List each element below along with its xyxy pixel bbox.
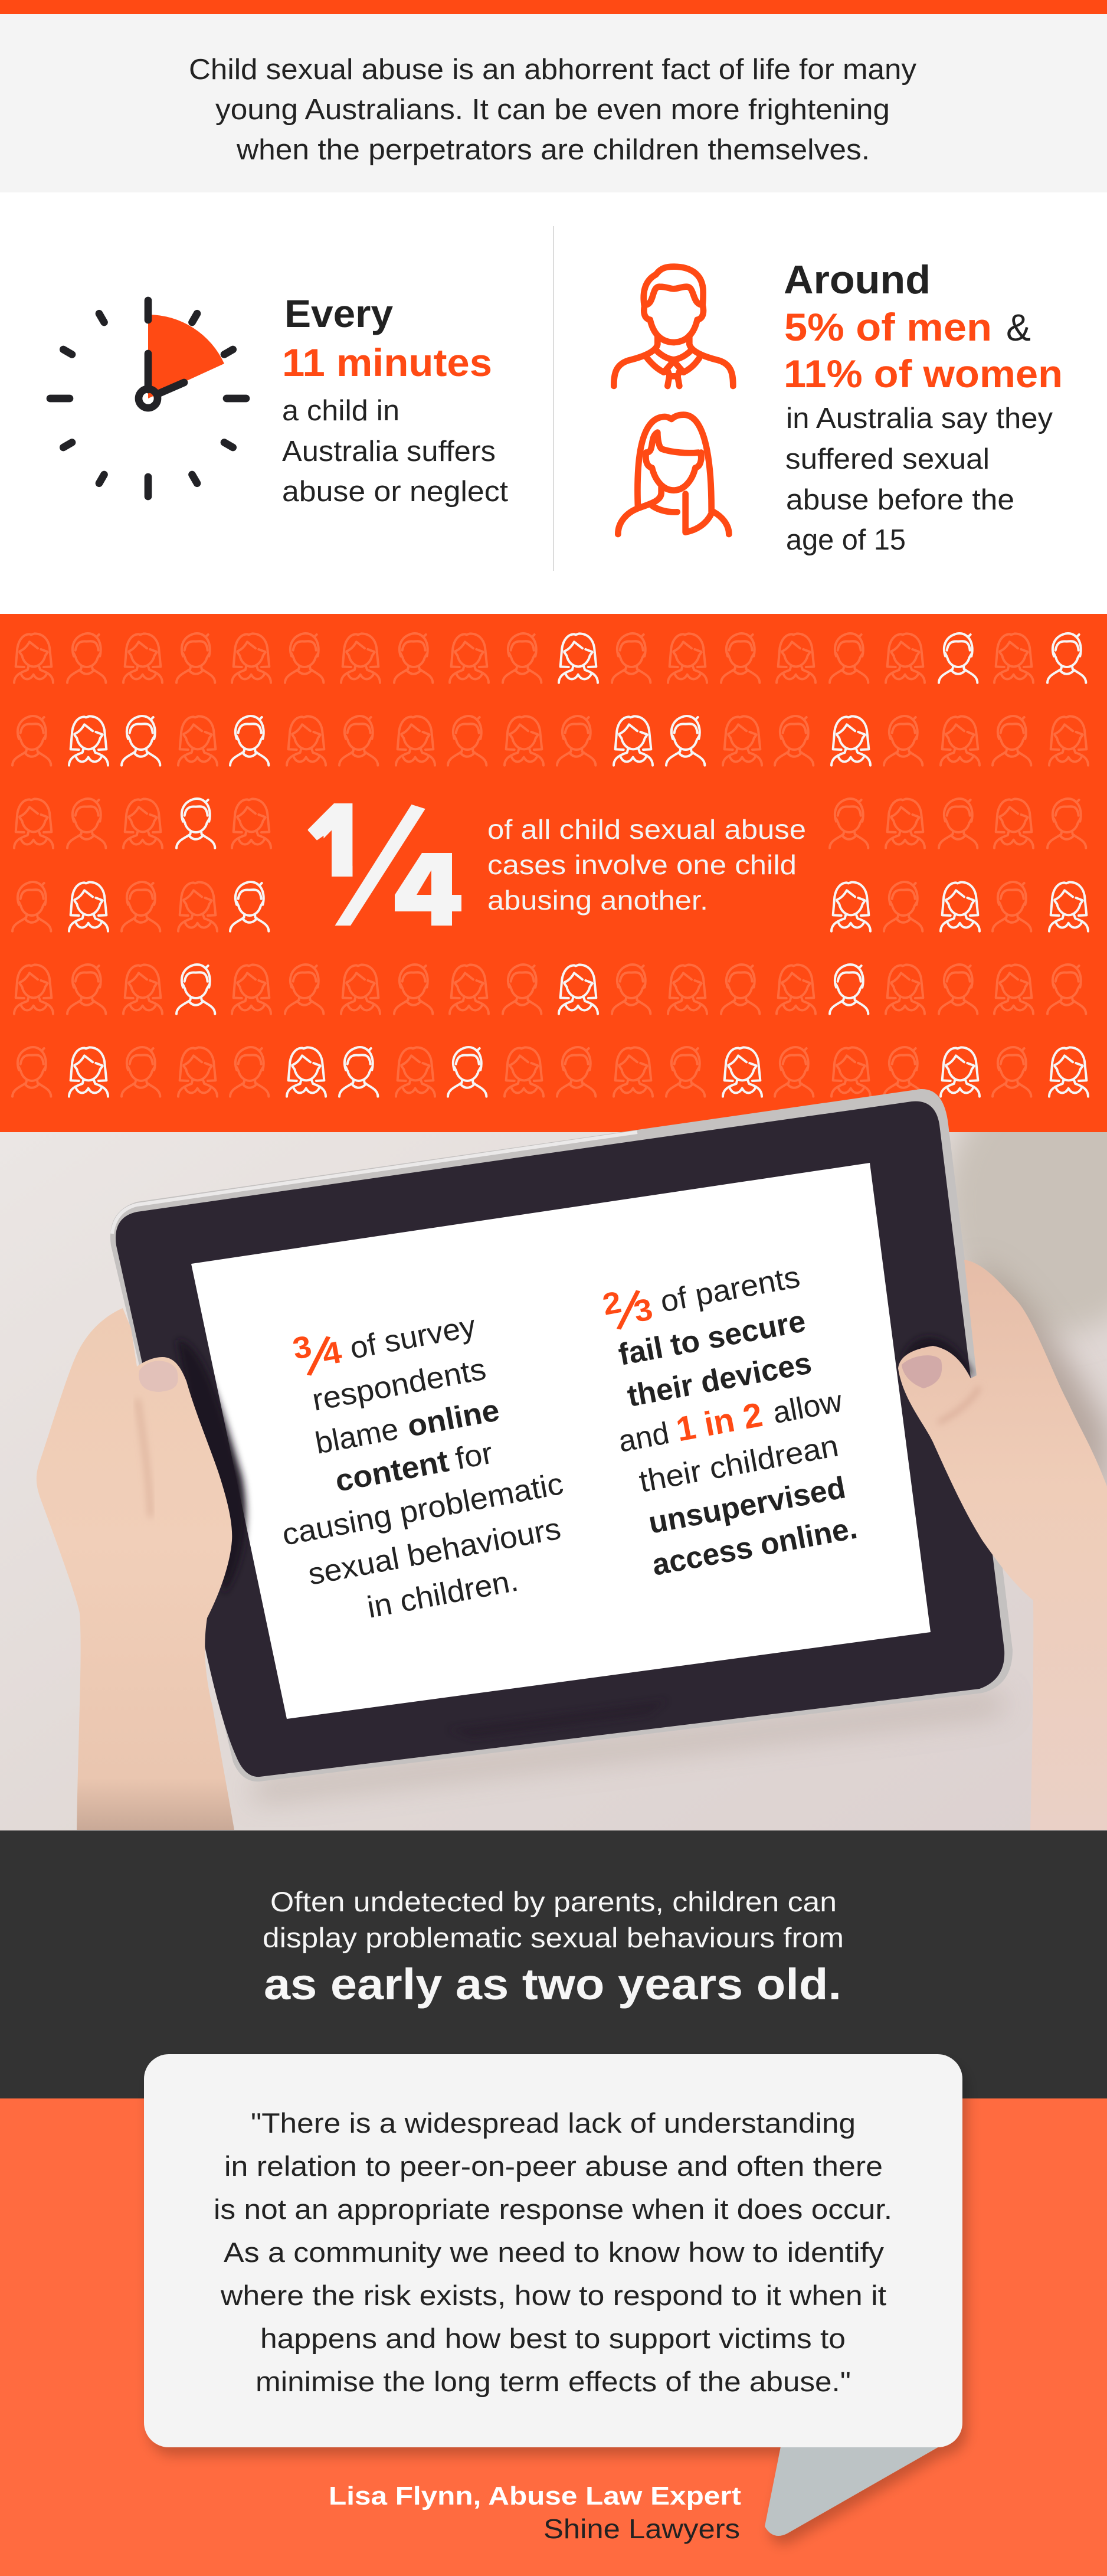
tablet text: online content: online (405, 1393, 502, 1444)
text: every 11 minutes: Australia suffers (282, 436, 496, 468)
early age text: Often undetected by parents, children can (270, 1886, 837, 1917)
icon: clock (50, 300, 246, 496)
panel: early age (0, 1830, 1107, 2098)
quote text: "There is a widespread lack of understanding (251, 2107, 856, 2139)
tablet text: online content: respondents (310, 1352, 489, 1418)
early age text: display problematic sexual behaviours from (263, 1922, 844, 1953)
text: of all cases (487, 814, 806, 916)
tablet text: parents: of parents (658, 1260, 803, 1319)
icon: woman (618, 415, 729, 534)
tablet text: online content: content (333, 1444, 451, 1499)
fraction: one quarter: / (315, 763, 437, 993)
text: 5% of men and 11% of women: 11% of women (784, 352, 1063, 395)
tablet text: parents: 1 in 2 (673, 1395, 765, 1449)
fraction: one quarter: 1 (311, 782, 364, 899)
quote text: in relation to peer-on-peer abuse and often there (224, 2150, 883, 2182)
early age text (263, 1886, 844, 2009)
early age text: as early as two years old. (264, 1960, 841, 2009)
fraction: one quarter (308, 803, 461, 926)
text: 5% of men and 11% of women: age of 15 (786, 524, 906, 556)
text: of all cases: abusing another. (487, 885, 708, 916)
text: every 11 minutes: 11 minutes (282, 341, 492, 384)
text: every 11 minutes: abuse or neglect (282, 476, 508, 508)
text: 5% of men and 11% of women: suffered sexual (785, 443, 990, 475)
right hand (898, 1260, 1107, 1830)
attribution: Shine Lawyers (543, 2513, 740, 2544)
intro text: young Australians. It can be even more frightening (215, 94, 890, 126)
quote text (214, 2107, 892, 2397)
fraction: one quarter: 4 (395, 831, 461, 948)
quote text: happens and how best to support victims to (260, 2323, 846, 2354)
tablet text: parents: allow (770, 1384, 845, 1430)
panel: photo background (0, 1074, 1107, 1830)
highlighted people icons (69, 633, 1088, 1097)
quote speech bubble (144, 2054, 962, 2536)
left hand (37, 1308, 246, 1830)
tablet text: parents: unsupervised (646, 1470, 849, 1541)
text: 5% of men and 11% of women: abuse before the (786, 484, 1014, 516)
tablet text: online content: for (453, 1436, 496, 1476)
fraction: three quarters: / (304, 1325, 333, 1390)
text: of all cases: cases involve one child (487, 849, 797, 880)
tablet text: online content: causing problematic (280, 1467, 566, 1552)
fraction: two thirds: / (614, 1279, 643, 1343)
fraction: two thirds: 3 (631, 1292, 656, 1329)
fraction: three quarters: 4 (320, 1335, 345, 1372)
tablet text: online content: sexual behaviours (306, 1512, 564, 1592)
tablet text: online content (280, 1309, 566, 1625)
text: 5% of men and 11% of women: 5% of men (784, 305, 992, 349)
panel: quote background (0, 2098, 1107, 2576)
panel: one in four (0, 614, 1107, 1132)
tablet screen (191, 1163, 931, 1719)
fraction: two thirds: 2 (600, 1285, 624, 1322)
intro text: when the perpetrators are children themselves. (236, 134, 870, 166)
fraction: two thirds (600, 1279, 656, 1343)
attribution (329, 2482, 741, 2544)
attribution: Lisa Flynn, Abuse Law Expert (329, 2482, 741, 2510)
text: 5% of men and 11% of women: in Australia say they (786, 403, 1053, 434)
quote text: minimise the long term effects of the abuse." (256, 2366, 851, 2397)
top orange bar (0, 0, 1107, 14)
intro text (189, 54, 917, 166)
text: 5% of men and 11% of women (784, 257, 1063, 556)
illustration: hands holding tablet (37, 1089, 1107, 1830)
text: of all cases: of all child sexual abuse (487, 814, 806, 845)
quote text: As a community we need to know how to identify (224, 2237, 885, 2268)
tablet text: online content: blame (313, 1412, 401, 1461)
text: 5% of men and 11% of women: & (1006, 306, 1031, 349)
tablet (110, 1089, 1013, 1781)
text: every 11 minutes: Every (284, 292, 393, 335)
tablet text: parents: and (616, 1416, 672, 1459)
quote text: where the risk exists, how to respond to it when it (220, 2280, 886, 2311)
fraction: three quarters: 3 (290, 1329, 315, 1367)
text: every 11 minutes: a child in (282, 395, 399, 427)
tablet text: parents: fail to secure (616, 1304, 808, 1372)
faded people icons (12, 633, 1088, 1097)
panel: intro (0, 14, 1107, 192)
icon: man (614, 267, 733, 386)
tablet text: parents (600, 1260, 860, 1583)
tablet text: parents: their childrean (637, 1428, 841, 1499)
text: 5% of men and 11% of women: Around (784, 257, 931, 302)
tablet text: parents: access online. (650, 1511, 860, 1583)
fraction: three quarters (290, 1325, 345, 1390)
text: every 11 minutes (282, 292, 508, 508)
panel: statistics (0, 192, 1107, 614)
tablet text: online content: in children. (365, 1564, 521, 1625)
tablet text: online content: of survey (348, 1309, 479, 1366)
intro text: Child sexual abuse is an abhorrent fact of life for many (189, 54, 917, 86)
quote text: is not an appropriate response when it does occur. (214, 2193, 892, 2225)
tablet text: parents: their devices (625, 1346, 814, 1414)
